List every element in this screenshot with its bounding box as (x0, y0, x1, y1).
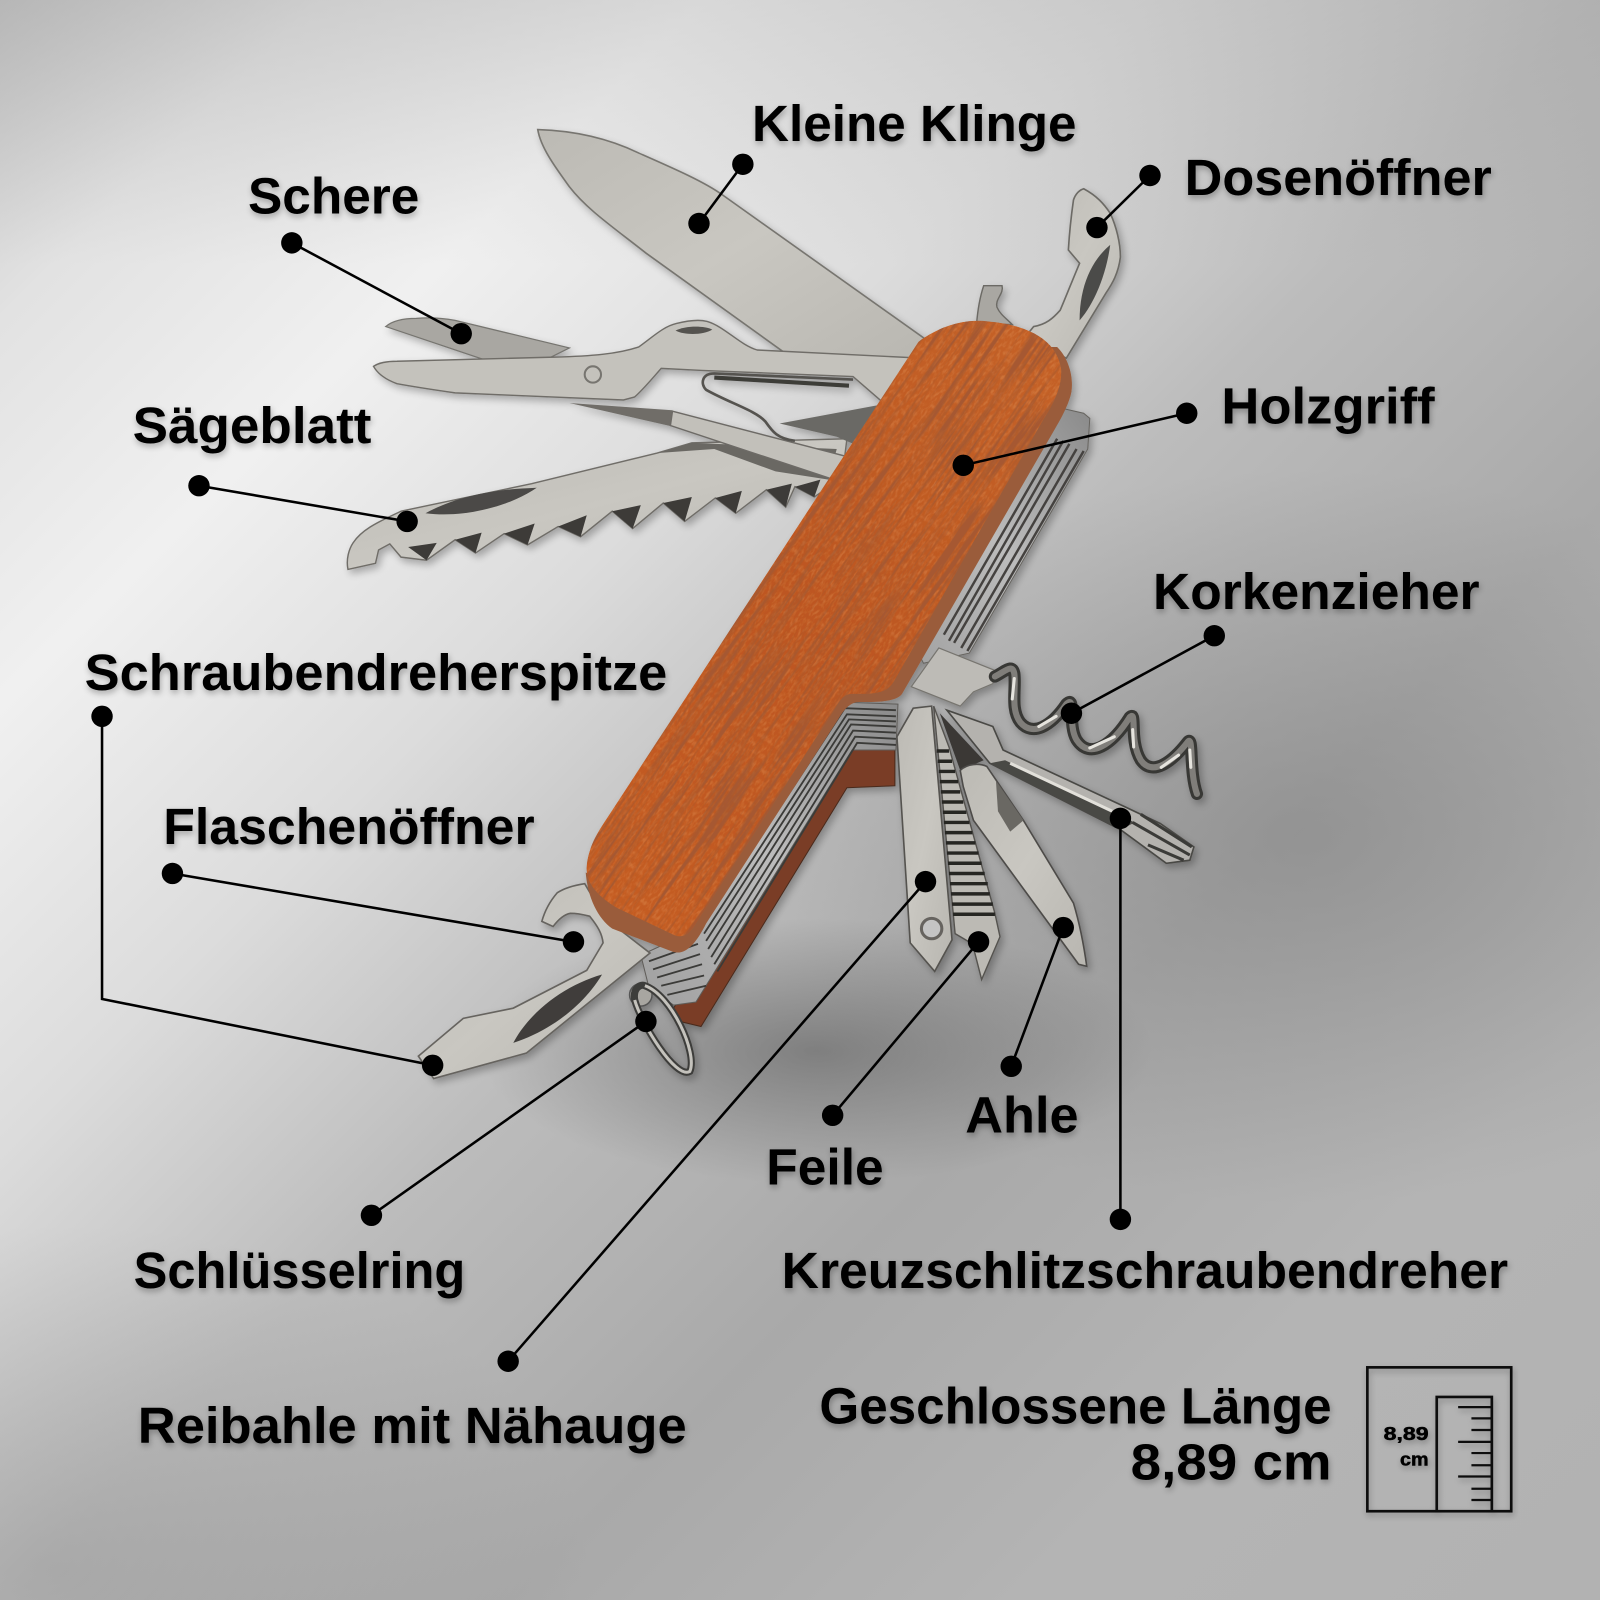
leader: Sägeblatt (188, 475, 418, 532)
callout: Holzgriff (953, 377, 1436, 476)
label: Schere: Schere (248, 167, 419, 224)
metal layers right (898, 408, 1090, 663)
leader: Ahle (1001, 917, 1074, 1077)
closed length text: 8,89 cm (1131, 1434, 1332, 1491)
corkscrew base (911, 648, 995, 706)
wood handle (585, 320, 1078, 952)
scissors spring (703, 373, 853, 441)
label: Korkenzieher: Korkenzieher (1153, 563, 1480, 620)
leader: Flaschenöffner (162, 863, 584, 953)
scissors (373, 318, 921, 441)
can opener (1026, 189, 1120, 358)
opener slot (513, 974, 602, 1043)
leader: Holzgriff (953, 403, 1197, 476)
label: Reibahle mit Nähauge: Reibahle mit Nähauge (138, 1397, 687, 1454)
lower tool bar (569, 403, 884, 480)
closed length text (819, 1377, 1332, 1491)
key ring (630, 984, 691, 1072)
label: Kreuzschlitzschraubendreher: Kreuzschlitzschraubendreher (782, 1242, 1508, 1299)
wood face (586, 320, 1062, 936)
callout: Ahle (965, 917, 1079, 1144)
leader: Kleine Klinge (688, 154, 754, 234)
callout: Dosenöffner (1086, 149, 1492, 238)
rear wood scale (673, 743, 895, 1027)
file stripes (937, 751, 995, 914)
label: Holzgriff: Holzgriff (1221, 377, 1436, 434)
label: Schlüsselring: Schlüsselring (134, 1242, 465, 1299)
leader: Schraubendreherspitze (91, 706, 443, 1076)
scissors lower blade and handle (373, 320, 921, 403)
can opener slot (1080, 245, 1110, 320)
leader: Schere (281, 232, 472, 344)
leader: Reibahle mit Nähauge (497, 871, 936, 1372)
leader: Feile (822, 931, 989, 1126)
leader: Kreuzschlitzschraubendreher (1110, 808, 1131, 1230)
saw blade (347, 439, 847, 569)
callout: Sägeblatt (133, 397, 418, 532)
callout: Schlüsselring (134, 1011, 657, 1299)
saw back shadow (658, 443, 837, 480)
label: Schraubendreherspitze: Schraubendreherspitze (85, 644, 667, 701)
leader: Dosenöffner (1086, 165, 1161, 238)
label: Kleine Klinge: Kleine Klinge (752, 95, 1077, 152)
callout: Kleine Klinge (688, 95, 1077, 234)
label: Sägeblatt: Sägeblatt (133, 397, 371, 454)
label: Flaschenöffner: Flaschenöffner (163, 798, 535, 855)
leader: Korkenzieher (1061, 625, 1225, 724)
metal stack lower (641, 702, 898, 1005)
icon: ruler size box: cm (1400, 1448, 1429, 1469)
bottom bottle opener and screwdriver tip (418, 884, 650, 1079)
awl (940, 713, 1087, 966)
label: Ahle: Ahle (965, 1087, 1079, 1144)
callout: Kreuzschlitzschraubendreher (782, 808, 1508, 1299)
scissors slot (676, 327, 712, 334)
scissors upper blade (386, 318, 569, 361)
wood side edge (586, 347, 1072, 953)
callout: Korkenzieher (1061, 563, 1480, 724)
icon: ruler size box (1367, 1367, 1511, 1511)
label: Feile: Feile (766, 1139, 884, 1196)
callout: Feile (766, 931, 989, 1196)
label: Dosenöffner: Dosenöffner (1185, 149, 1492, 206)
leader: Schlüsselring (361, 1011, 657, 1226)
saw teeth shading (408, 480, 820, 560)
small blade (538, 130, 931, 367)
file (934, 706, 1000, 980)
icon: ruler size box: 8,89 (1384, 1423, 1429, 1444)
top bottle hook (977, 286, 1012, 324)
reamer with sewing eye (897, 706, 952, 971)
saw slot (426, 488, 537, 514)
callout: Schere (248, 167, 472, 344)
illustration: pocket knife (347, 130, 1228, 1084)
scissors pivot (585, 366, 601, 383)
callout: Reibahle mit Nähauge (138, 871, 936, 1454)
callout: Flaschenöffner (162, 798, 584, 953)
phillips screwdriver (947, 710, 1194, 863)
corkscrew (995, 669, 1197, 794)
closed length text: Geschlossene Länge (819, 1377, 1332, 1434)
callout: Schraubendreherspitze (85, 644, 667, 1076)
